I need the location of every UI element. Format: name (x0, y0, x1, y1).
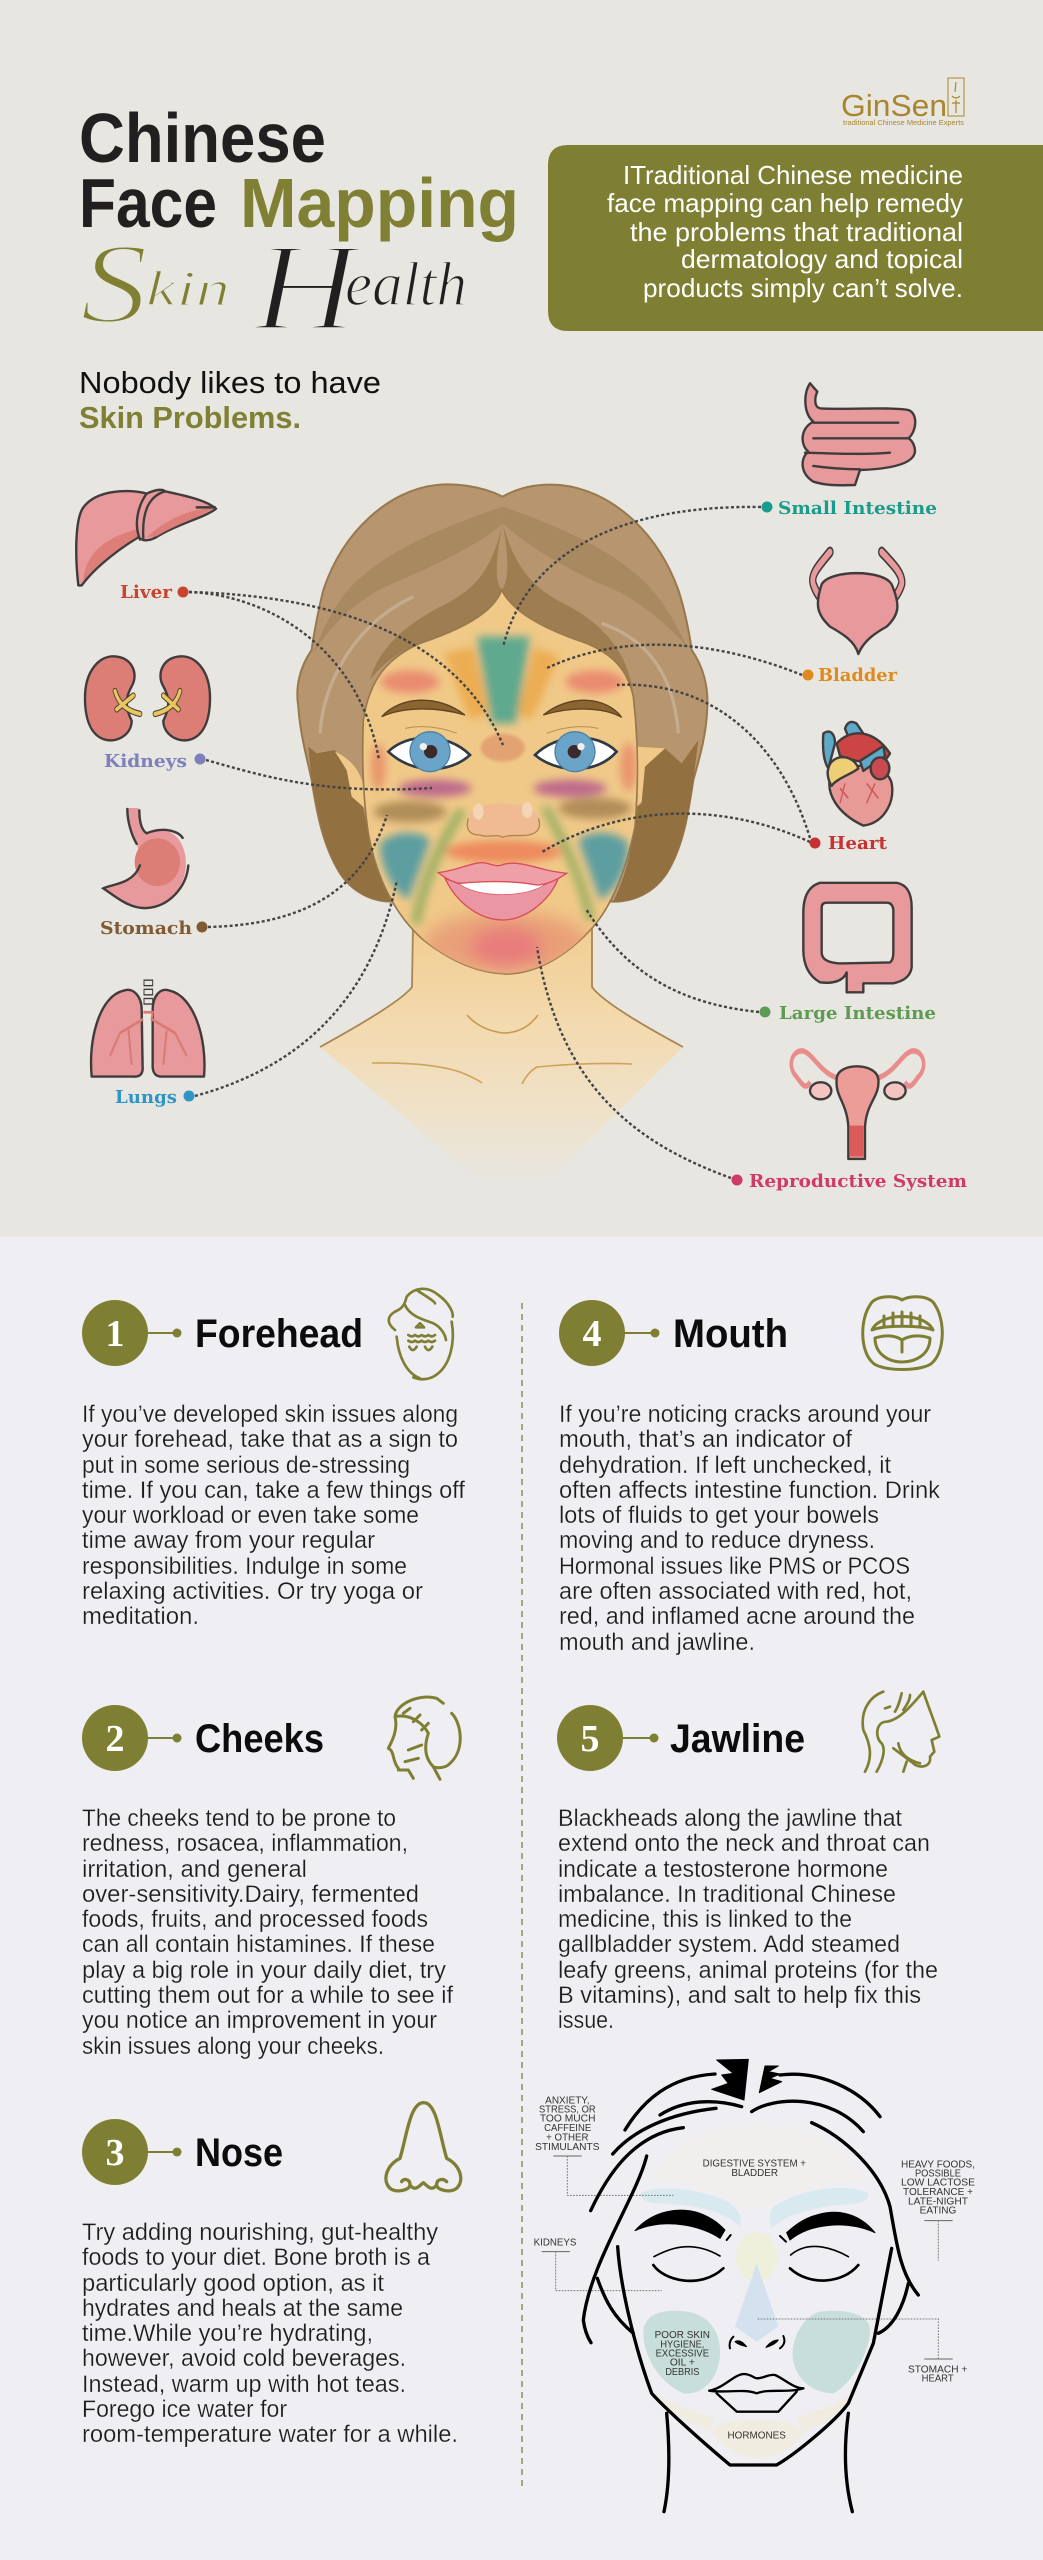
text: cheeks: play a big role in your daily diet, try (82, 1957, 446, 1984)
text: forehead: relaxing activities. Or try yoga or (82, 1578, 423, 1605)
zone labels: + OTHER (546, 2132, 588, 2143)
heading: cheeks: Cheeks (195, 1717, 324, 1761)
text: mouth: often affects intestine function. Drink (559, 1477, 941, 1504)
text: mouth: mouth, that’s an indicator of (559, 1426, 852, 1453)
number badge 5: 5 (580, 1718, 600, 1760)
icon: open mouth (863, 1297, 942, 1370)
text: cheeks: over-sensitivity.Dairy, fermented (82, 1881, 419, 1908)
text: mouth: lots of fluids to get your bowels (559, 1502, 879, 1529)
text: jawline (558, 1805, 938, 2034)
lips (438, 863, 567, 920)
text: jawline: B vitamins), and salt to help fix this (558, 1982, 921, 2009)
title (79, 99, 519, 242)
title: Face (79, 164, 217, 242)
eyes (388, 727, 617, 772)
zone labels: EATING (920, 2206, 957, 2217)
text: forehead (82, 1401, 465, 1630)
section 1: forehead (82, 1289, 465, 1630)
text: forehead: meditation. (82, 1603, 199, 1630)
text: jawline: leafy greens, animal proteins (for the (558, 1957, 938, 1984)
text: forehead: time. If you can, take a few things off (82, 1477, 465, 1504)
dashed label leaders (542, 2156, 953, 2359)
text: nose: foods to your diet. Bone broth is a (82, 2244, 431, 2271)
text: mouth: moving and to reduce dryness. (559, 1527, 875, 1554)
script subtitle: ealth (345, 251, 467, 319)
intro panel: dermatology and topical (681, 244, 963, 274)
face shape (363, 590, 637, 974)
text: jawline: medicine, this is linked to the (558, 1906, 852, 1933)
zone labels: STRESS, OR (539, 2105, 596, 2116)
zone labels: HEART (922, 2374, 954, 2385)
icon: liver (76, 490, 216, 585)
heading: jawline: Jawline (670, 1717, 805, 1761)
illustrated face (297, 484, 707, 975)
zone labels: TOLERANCE + (903, 2187, 973, 2198)
text: mouth (559, 1401, 941, 1656)
number badge 2: 2 (106, 1718, 124, 1760)
text: cheeks: The cheeks tend to be prone to (82, 1805, 396, 1832)
zone labels: DEBRIS (665, 2367, 700, 2378)
text: mouth: Hormonal issues like PMS or PCOS (559, 1553, 910, 1580)
number badge 5 (557, 1705, 658, 1771)
zone labels (534, 2095, 975, 2442)
text: cheeks: irritation, and general (82, 1856, 307, 1883)
text: cheeks: redness, rosacea, inflammation, (82, 1830, 408, 1857)
text: mouth: If you’re noticing cracks around your (559, 1401, 931, 1428)
text: forehead: responsibilities. Indulge in some (82, 1553, 407, 1580)
script subtitle: H (251, 219, 364, 357)
zone labels: TOO MUCH (540, 2114, 595, 2125)
text: nose (82, 2219, 458, 2448)
section 3: nose (82, 2103, 461, 2448)
label: liver: Liver (120, 582, 173, 603)
zone labels: STOMACH + (908, 2365, 967, 2376)
text: nose: Instead, warm up with hot teas. (82, 2371, 406, 2398)
script subtitle: kin (146, 260, 230, 316)
zone labels: HYGIENE, (660, 2339, 704, 2350)
subheading: Skin Problems. (79, 400, 301, 435)
text: mouth: red, and inflamed acne around the (559, 1603, 915, 1630)
text: forehead: time away from your regular (82, 1527, 375, 1554)
line-art face map (534, 2059, 975, 2512)
face map colour zones (371, 637, 636, 975)
text: jawline: extend onto the neck and throat can (558, 1830, 930, 1857)
text: jawline: Blackheads along the jawline that (558, 1805, 902, 1832)
bottom background panel (0, 1237, 1043, 2560)
text: nose: Forego ice water for (82, 2396, 287, 2423)
heading: mouth: Mouth (673, 1312, 788, 1356)
zone labels: HORMONES (727, 2431, 786, 2442)
text: cheeks: cutting them out for a while to see if (82, 1982, 453, 2009)
text: nose: particularly good option, as it (82, 2270, 384, 2297)
text: nose: time.While you’re hydrating, (82, 2320, 373, 2347)
top background panel (0, 0, 1043, 1237)
text: forehead: your forehead, take that as a sign to (82, 1426, 458, 1453)
zone labels: EXCESSIVE (656, 2348, 709, 2359)
number badge 1 (82, 1300, 182, 1366)
icon: towel wrapped head (389, 1289, 453, 1379)
zone labels: OIL + (670, 2358, 695, 2369)
number badge 4 (559, 1300, 660, 1366)
zone labels: POSSIBLE (915, 2169, 961, 2180)
eyebrows (382, 700, 622, 717)
face line art (583, 2059, 918, 2512)
logo: traditional Chinese Medicine Experts (843, 120, 965, 127)
label: small intestine: Small Intestine (778, 498, 937, 519)
script subtitle: S (80, 220, 148, 347)
icon: small intestine (803, 383, 915, 485)
text: nose: Try adding nourishing, gut-healthy (82, 2219, 438, 2246)
text: nose: however, avoid cold beverages. (82, 2345, 406, 2372)
zone labels: POOR SKIN (655, 2330, 710, 2341)
subheading (79, 365, 381, 435)
text: cheeks: foods, fruits, and processed foods (82, 1906, 428, 1933)
zone labels: LATE-NIGHT (908, 2196, 968, 2207)
text: mouth: are often associated with red, hot, (559, 1578, 912, 1605)
icon: face profile (863, 1692, 939, 1772)
heading: forehead: Forehead (195, 1312, 363, 1356)
icon: nose (386, 2103, 461, 2191)
chest and neck (320, 925, 683, 1186)
face map zones (640, 2124, 870, 2458)
text: cheeks: can all contain histamines. If these (82, 1931, 435, 1958)
intro panel: face mapping can help remedy (607, 188, 963, 218)
icon: head in hair net (388, 1697, 460, 1779)
zone labels: HEAVY FOODS, (901, 2159, 975, 2170)
label: kidneys: Kidneys (104, 751, 187, 772)
label: reproductive system: Reproductive System (749, 1171, 967, 1192)
icon: bladder (813, 552, 902, 654)
text: cheeks: skin issues along your cheeks. (82, 2033, 384, 2060)
section 5: jawline (557, 1692, 939, 2034)
section 2: cheeks (82, 1697, 460, 2060)
text: mouth: mouth and jawline. (559, 1629, 755, 1656)
zone labels: CAFFEINE (544, 2123, 591, 2134)
label: large intestine: Large Intestine (779, 1003, 936, 1024)
section 4: mouth (559, 1297, 942, 1656)
text: cheeks: you notice an improvement in your (82, 2007, 437, 2034)
icon: lungs (91, 980, 204, 1077)
logo: GinSen (841, 88, 947, 123)
column divider (521, 1303, 523, 2487)
dotted connector lines (189, 507, 810, 1178)
number badge 3: 3 (106, 2132, 124, 2174)
text: forehead: put in some serious de-stressing (82, 1452, 410, 1479)
zone labels: KIDNEYS (534, 2237, 577, 2248)
label: lungs: Lungs (115, 1087, 177, 1108)
intro panel: products simply can’t solve. (643, 273, 963, 303)
zone labels: ANXIETY, (545, 2095, 589, 2106)
nose (467, 802, 540, 837)
text: jawline: issue. (558, 2007, 614, 2034)
ears (335, 747, 665, 808)
number badge 2 (82, 1705, 182, 1771)
text: jawline: indicate a testosterone hormone (558, 1856, 888, 1883)
title: Mapping (240, 164, 519, 242)
zone labels: STIMULANTS (535, 2142, 600, 2153)
zone labels: LOW LACTOSE (901, 2178, 975, 2189)
title: Chinese (79, 99, 326, 177)
intro panel (548, 145, 1043, 331)
text: nose: hydrates and heals at the same (82, 2295, 403, 2322)
text: cheeks (82, 1805, 453, 2060)
heading: nose: Nose (195, 2131, 283, 2175)
zone labels: DIGESTIVE SYSTEM + (703, 2159, 806, 2170)
script subtitle (80, 219, 467, 357)
text: forehead: your workload or even take some (82, 1502, 419, 1529)
number badge 1: 1 (106, 1313, 124, 1355)
label: stomach: Stomach (100, 918, 192, 939)
icon: stomach (103, 808, 188, 908)
text: forehead: If you’ve developed skin issues along (82, 1401, 458, 1428)
label: heart: Heart (828, 833, 888, 854)
number badge 4: 4 (582, 1313, 602, 1355)
icon: large intestine (803, 883, 912, 992)
text: nose: room-temperature water for a while. (82, 2421, 458, 2448)
icon: reproductive system (791, 1051, 924, 1159)
number badge 3 (82, 2119, 182, 2185)
intro panel: the problems that traditional (630, 217, 963, 247)
intro panel: ITraditional Chinese medicine (623, 160, 963, 190)
logo (841, 78, 965, 127)
hair (297, 484, 707, 902)
icon: heart (823, 722, 892, 826)
zone labels: BLADDER (731, 2168, 778, 2179)
text: mouth: dehydration. If left unchecked, it (559, 1452, 891, 1479)
subheading: Nobody likes to have (79, 365, 381, 400)
text: jawline: gallbladder system. Add steamed (558, 1931, 900, 1958)
icon: kidneys (85, 656, 210, 740)
text: jawline: imbalance. In traditional Chinese (558, 1881, 896, 1908)
label: bladder: Bladder (818, 665, 898, 686)
